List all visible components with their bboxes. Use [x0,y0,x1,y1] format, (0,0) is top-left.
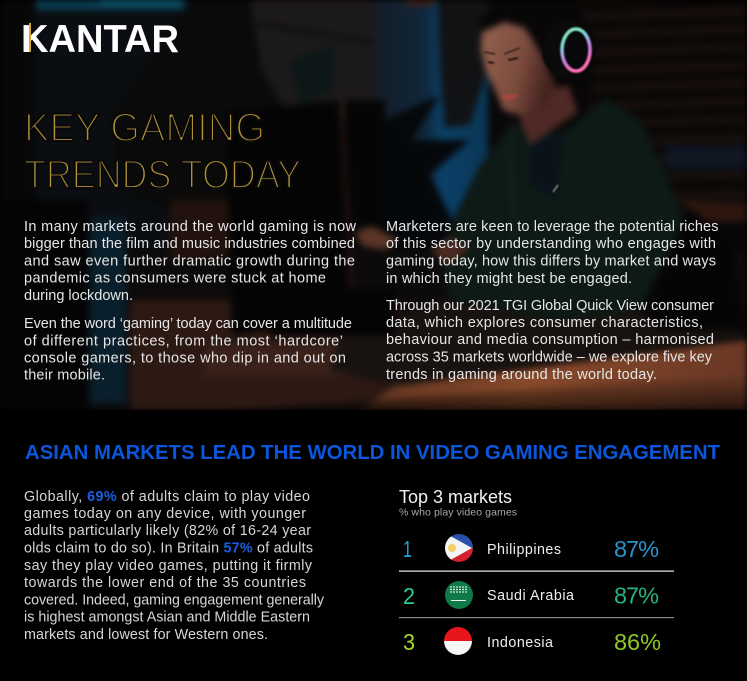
body text: gaming engagement: adults particularly likely (82% of 16-24 year [24,523,311,539]
row 3: Indonesia: 86% [614,629,661,655]
intro text: left column: Even the word ‘gaming’ today can cover a multitude [24,316,352,332]
laptop [225,100,352,335]
row 1: Philippines [403,533,659,563]
back wall [0,0,747,410]
flag: Indonesia [444,627,472,655]
intro text: right column: behaviour and media consumption – harmonised [386,332,714,348]
intro text: right column: of this sector by understanding who engages with [386,236,716,252]
row 3: Indonesia [403,627,661,655]
body text: gaming engagement: is highest amongst Asian and Middle Eastern [24,610,310,626]
intro text: left column [24,219,357,384]
neck [518,85,578,145]
intro text: left column: console gamers, to those who dip in and out on [24,350,346,366]
row 1: Philippines: 1 [403,536,412,562]
intro text: right column: in which they might best be engaged. [386,271,632,287]
intro text: right column: gaming today, how this differs by market and ways [386,254,716,270]
title: key gaming trends today: TRENDS TODAY [24,153,301,197]
hoodie [440,98,720,320]
ranking panel: top 3 markets [399,487,674,655]
headset cup [542,21,594,79]
row 2: Saudi Arabia: 87% [614,582,659,608]
intro text: right column: trends in gaming around the world today. [386,367,657,383]
row 3: Indonesia: Indonesia [487,635,553,651]
body text: gaming engagement [24,489,325,643]
row 1: Philippines: Philippines [487,542,561,558]
row 2: Saudi Arabia [403,581,659,609]
body text: gaming engagement: covered. Indeed, gaming engagement generally [24,592,325,608]
panel subheading: % who play video games [399,506,517,518]
hair [478,0,620,150]
intro text: left column: In many markets around the world gaming is now [24,219,357,235]
intro text: right column: across 35 markets worldwide – we explore five key [386,350,713,366]
black lower panel [0,410,747,681]
logo: Kantar: KANTAR [21,18,179,61]
window blinds [575,0,747,210]
panel heading: Top 3 markets [399,487,512,507]
desk [0,250,747,410]
body text: gaming engagement: towards the lower end of the 35 countries [24,575,306,591]
body text: gaming engagement: Globally, 69% of adults claim to play video [24,489,310,505]
hands [355,226,398,250]
hero photo: gamer at desk [0,0,747,410]
title: key gaming trends today: KEY GAMING [24,106,265,150]
body text: gaming engagement: olds claim to do so). In Britain 57% of adults [24,540,313,556]
body text: gaming engagement: markets and lowest for Western ones. [24,627,268,643]
flag: Philippines [445,533,473,563]
blue-lit palm [360,95,470,245]
shelf shadow [438,0,490,128]
central plant [110,0,290,215]
body text: gaming engagement: games today on any device, with younger [24,506,306,522]
face details [501,94,519,100]
title: key gaming trends today [24,106,301,197]
intro text: right column: Through our 2021 TGI Global Quick View consumer [386,298,714,314]
intro text: left column: their mobile. [24,368,105,384]
intro text: left column: and saw even further dramatic growth during the [24,254,355,270]
headset light ring [562,29,590,71]
intro text: left column: pandemic as consumers were stuck at home [24,270,326,286]
body text: gaming engagement: say they play video games, putting it firmly [24,558,313,574]
row 1: Philippines: 87% [614,536,659,562]
intro text: right column [386,219,718,383]
intro text: left column: bigger than the film and music industries combined [24,236,355,252]
intro text: right column: data, which explores consumer characteristics, [386,315,703,331]
flag: Saudi Arabia [445,581,473,609]
face [481,22,556,115]
intro text: left column: of different practices, from the most ‘hardcore’ [24,334,343,350]
row 3: Indonesia: 3 [403,629,415,655]
intro text: left column: during lockdown. [24,288,133,304]
curtain rail [258,24,372,42]
row 2: Saudi Arabia: 2 [403,583,415,609]
intro text: right column: Marketers are keen to leverage the potential riches [386,219,718,235]
row 2: Saudi Arabia: Saudi Arabia [487,588,574,604]
section heading: ASIAN MARKETS LEAD THE WORLD IN VIDEO GAMING ENGAGEMENT [25,441,720,464]
